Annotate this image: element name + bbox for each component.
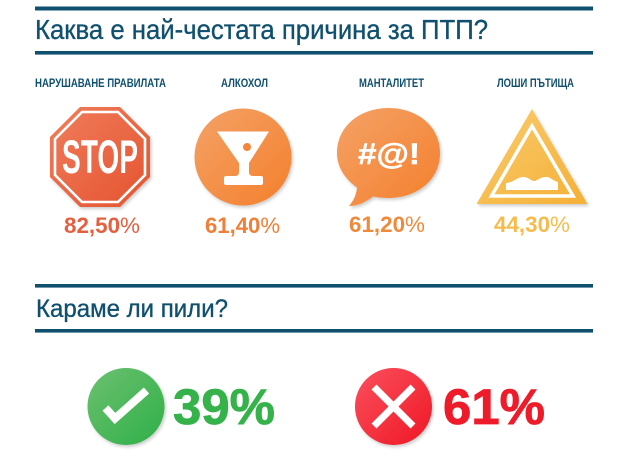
label: rule violations: НАРУШАВАНЕ ПРАВИЛАТА: [35, 78, 166, 90]
value: 44,30%: 44,30%: [494, 212, 570, 237]
icon: bumpy road sign: [476, 109, 588, 204]
icon: cocktail glass: [194, 108, 292, 206]
result: no: [355, 368, 545, 445]
icon: cross: [355, 368, 432, 445]
label: mentality: МАНТАЛИТЕТ: [359, 78, 424, 90]
value: 61,20%: 61,20%: [349, 212, 425, 237]
result: yes: [88, 368, 275, 445]
icon: speech bubble: #@!: [358, 138, 420, 171]
column: rule violations: [35, 78, 166, 238]
title: drunk driving: Караме ли пили?: [36, 295, 228, 323]
value: 61%: 61%: [443, 379, 545, 435]
icon: check mark: [88, 368, 164, 445]
value: 39%: 39%: [173, 379, 275, 435]
value: 82,50%: 82,50%: [64, 213, 140, 238]
value: 61,40%: 61,40%: [205, 213, 280, 238]
icon: speech bubble: [337, 108, 440, 206]
column: mentality: [337, 78, 440, 237]
column: bad roads: [476, 78, 588, 237]
title: causes: Каква е най-честата причина за ПТП?: [35, 14, 488, 45]
section header: drunk driving: [35, 284, 593, 333]
icon: stop sign: [50, 107, 150, 207]
icon: stop sign: STOP: [62, 130, 138, 183]
label: alcohol: АЛКОХОЛ: [221, 78, 268, 90]
section header: causes: [35, 6, 593, 55]
label: bad roads: ЛОШИ ПЪТИЩА: [497, 78, 574, 90]
column: alcohol: [194, 78, 292, 238]
